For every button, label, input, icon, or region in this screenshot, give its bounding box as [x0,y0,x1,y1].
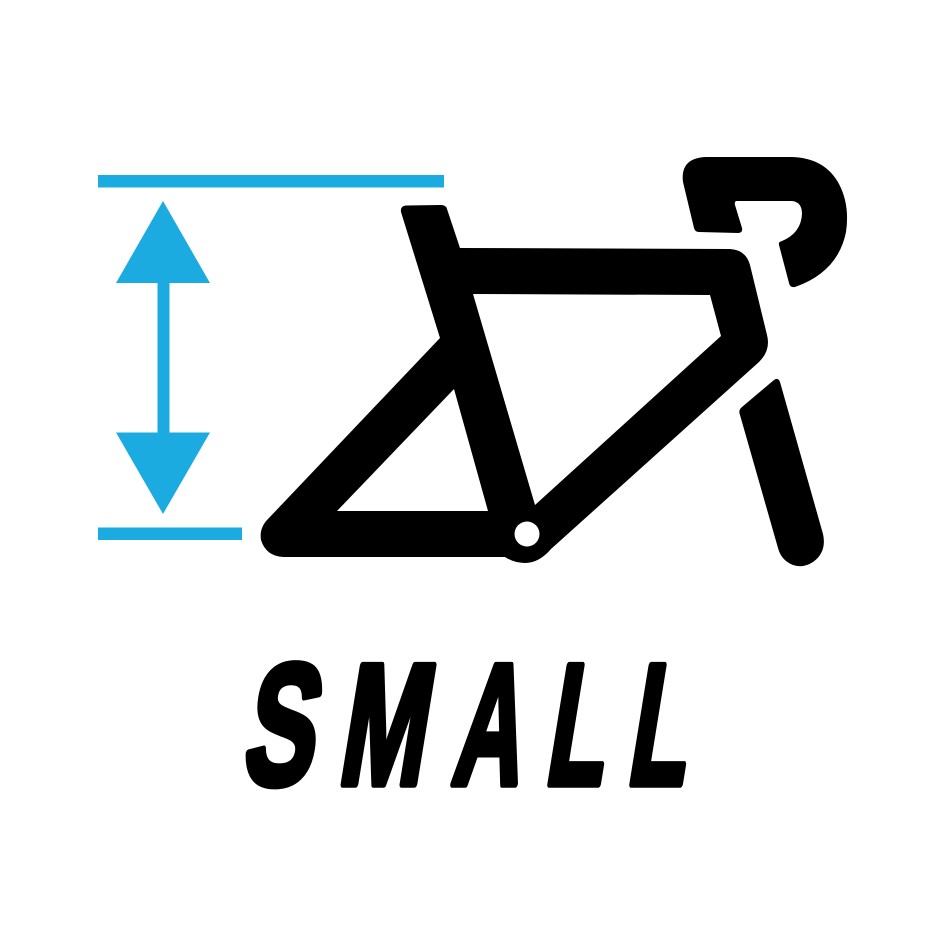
label: SMALL: L [619,629,709,821]
label: SMALL: M [330,629,447,821]
label: SMALL: L [537,629,627,821]
icon: bicycle frame [261,205,768,563]
label: SMALL [234,628,709,821]
icon: handlebar [683,157,847,287]
top measurement line [98,175,444,188]
label: SMALL: S [234,628,336,821]
bottom bracket hole [514,522,540,546]
icon: double-headed height arrow [116,201,210,514]
icon: fork [739,379,824,566]
bottom measurement line [98,528,242,540]
label: SMALL: A [444,628,544,821]
